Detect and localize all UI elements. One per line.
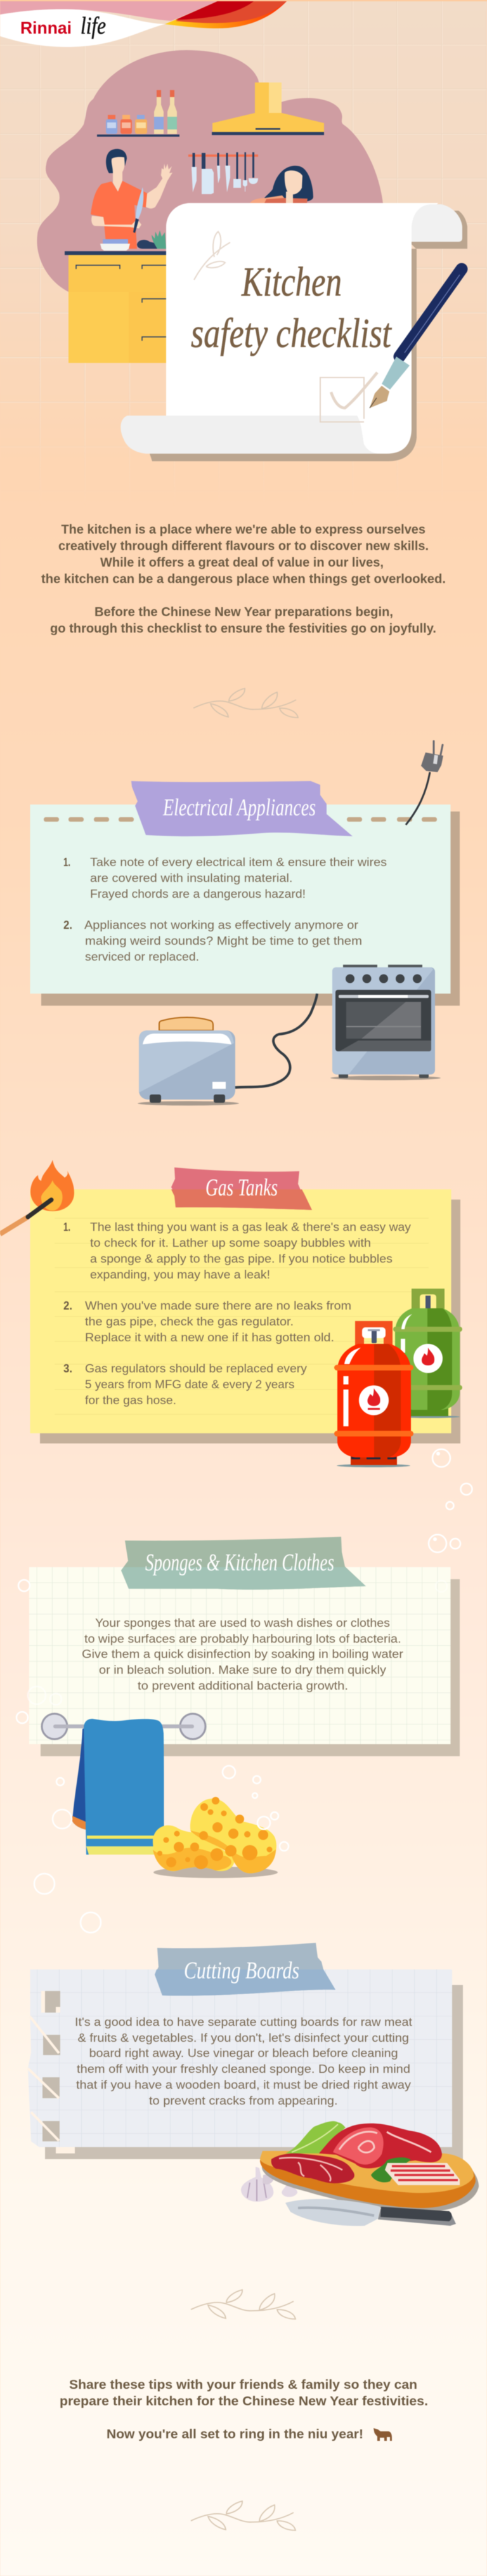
kitchen cabinets xyxy=(65,251,166,363)
flame xyxy=(30,1160,74,1211)
title xyxy=(191,259,392,357)
list: serviced or replaced. xyxy=(85,950,199,963)
list: When you've made sure there are no leaks from xyxy=(85,1299,351,1312)
list: Gas regulators should be replaced every xyxy=(85,1362,307,1375)
list: expanding, you may have a leak! xyxy=(90,1268,270,1281)
list: 2. xyxy=(63,1299,72,1312)
ruled lines xyxy=(55,1218,429,1414)
list: are covered with insulating material. xyxy=(90,872,293,884)
heading: Gas Tanks xyxy=(205,1174,278,1201)
counter items xyxy=(100,230,166,251)
icon: ox xyxy=(373,2428,392,2441)
leaf ornament xyxy=(193,688,298,718)
intro text: go through this checklist to ensure the festivities go on joyfully. xyxy=(50,622,436,636)
panel: sponges and kitchen clothes xyxy=(29,1537,460,1756)
icon: sponges xyxy=(153,1797,278,1878)
body text: board right away. Use vinegar or bleach before cleaning xyxy=(89,2047,398,2060)
parsley xyxy=(371,2157,411,2183)
body text: to prevent cracks from appearing. xyxy=(149,2094,338,2107)
soap bubbles lower xyxy=(16,1580,447,1933)
outro text: Now you're all set to ring in the niu year! xyxy=(107,2428,363,2441)
tiled wall background xyxy=(0,45,487,430)
leaf ornament xyxy=(191,2290,295,2319)
binder holes xyxy=(28,1991,75,2153)
panel card xyxy=(30,805,450,994)
intro text: the kitchen can be a dangerous place when things get overlooked. xyxy=(41,572,446,586)
heading tape xyxy=(171,1167,312,1210)
intro text: While it offers a great deal of value in our lives, xyxy=(100,556,384,570)
list: 5 years from MFG date & every 2 years xyxy=(85,1378,294,1391)
list: Frayed chords are a dangerous hazard! xyxy=(90,888,306,900)
list: Take note of every electrical item & ensure their wires xyxy=(90,856,387,869)
meat slices xyxy=(271,2153,354,2183)
panel card xyxy=(29,1567,450,1744)
panel shadow xyxy=(41,1579,460,1756)
icon: oven xyxy=(330,964,441,1080)
top scroll curl xyxy=(412,204,462,242)
body text: or in bleach solution. Make sure to dry them quickly xyxy=(99,1664,386,1676)
body text xyxy=(82,1617,403,1692)
list: making weird sounds? Might be time to get them xyxy=(85,935,362,947)
heading: Cutting Boards xyxy=(184,1957,299,1984)
icon: red gas tank xyxy=(334,1321,413,1467)
heading tape xyxy=(121,1537,366,1589)
list xyxy=(63,1221,411,1407)
outro text: Share these tips with your friends & family so they can xyxy=(69,2378,417,2392)
icon: burning match xyxy=(0,1160,74,1234)
lettuce xyxy=(285,2121,346,2153)
chef knife xyxy=(285,2199,456,2226)
list xyxy=(63,856,387,963)
panel: cutting boards xyxy=(28,1943,463,2159)
panel: electrical appliances xyxy=(30,741,460,1006)
soap bubbles upper xyxy=(429,1449,472,1553)
heading tape xyxy=(131,781,353,836)
panel shadow xyxy=(41,812,460,1006)
appliance power cord xyxy=(235,994,317,1088)
wall blob xyxy=(37,50,384,292)
body text: Give them a quick disinfection by soaking in boiling water xyxy=(82,1648,403,1660)
icon: green gas tank xyxy=(393,1289,462,1418)
body text: & fruits & vegetables. If you don't, let's disinfect your cutting xyxy=(77,2032,409,2044)
list: 1. xyxy=(63,856,70,869)
outro text: prepare their kitchen for the Chinese New Year festivities. xyxy=(60,2395,428,2408)
check box xyxy=(320,372,377,422)
body text: to prevent additional bacteria growth. xyxy=(138,1679,348,1692)
list: for the gas hose. xyxy=(85,1394,176,1407)
list: Appliances not working as effectively anymore or xyxy=(84,919,358,931)
leaf ornament xyxy=(191,2501,295,2530)
body text xyxy=(75,2016,412,2107)
body text: to wipe surfaces are probably harbouring lots of bacteria. xyxy=(84,1633,401,1645)
brand header xyxy=(0,0,487,47)
intro text: The kitchen is a place where we're able to express ourselves xyxy=(61,523,425,537)
paper shadow xyxy=(150,211,467,461)
title: safety checklist xyxy=(191,310,392,357)
roast meat xyxy=(319,2124,442,2169)
list: Replace it with a new one if it has gotten old. xyxy=(85,1331,334,1344)
body text: them off with your freshly cleaned sponge. Do keep in mind xyxy=(77,2063,410,2075)
list: to check for it. Lather up some soapy bubbles with xyxy=(90,1237,371,1249)
intro text xyxy=(41,523,446,636)
heading: Electrical Appliances xyxy=(162,794,316,821)
utensil rail xyxy=(188,152,258,194)
list: 1. xyxy=(63,1221,70,1233)
decorative sprig xyxy=(194,232,230,280)
heading: Sponges & Kitchen Clothes xyxy=(145,1549,334,1576)
woman leaning xyxy=(250,166,313,203)
list: The last thing you want is a gas leak & there's an easy way xyxy=(90,1221,411,1233)
match stick xyxy=(0,1200,51,1234)
list: a sponge & apply to the gas pipe. If you notice bubbles xyxy=(90,1252,393,1265)
man cooking xyxy=(91,149,172,249)
board xyxy=(262,2157,479,2212)
panel card xyxy=(30,1189,451,1433)
panel shadow xyxy=(40,1200,460,1443)
logo wordmark: life xyxy=(81,13,106,39)
list: the gas pipe, check the gas regulator. xyxy=(85,1315,294,1328)
intro text: creatively through different flavours or to discover new skills. xyxy=(58,539,429,553)
paper sheet xyxy=(166,203,438,454)
panel shadow xyxy=(45,1985,463,2159)
bottom scroll curl xyxy=(120,416,379,454)
title: Kitchen xyxy=(241,259,342,305)
body text: Your sponges that are used to wash dishes or clothes xyxy=(95,1617,390,1629)
bacon xyxy=(385,2163,460,2185)
plug and cord xyxy=(406,741,443,825)
logo wordmark: Rinnai xyxy=(20,18,72,37)
spice shelf xyxy=(97,90,179,137)
heading tape xyxy=(155,1943,335,1995)
list: 3. xyxy=(63,1362,72,1375)
list: 2. xyxy=(63,919,72,931)
body text: that if you have a wooden board, it must be dried right away xyxy=(76,2079,411,2091)
illustration: meat on cutting board xyxy=(241,2121,479,2226)
panel: gas tanks xyxy=(30,1167,460,1443)
logo wordmark xyxy=(20,13,106,39)
intro text: Before the Chinese New Year preparations begin, xyxy=(94,605,393,619)
stitched dashes xyxy=(44,817,437,822)
torn notepad sheet xyxy=(28,1969,452,2147)
icon: toaster xyxy=(138,1018,239,1105)
garlic xyxy=(241,2167,297,2202)
illustration: kitchen scene xyxy=(37,50,384,363)
body text: It's a good idea to have separate cutting boards for raw meat xyxy=(75,2016,412,2028)
outro text xyxy=(60,2378,428,2441)
icon: towel on rail xyxy=(42,1714,205,1855)
fountain pen xyxy=(370,269,462,408)
range hood xyxy=(212,82,324,135)
checklist paper scroll xyxy=(120,203,467,461)
